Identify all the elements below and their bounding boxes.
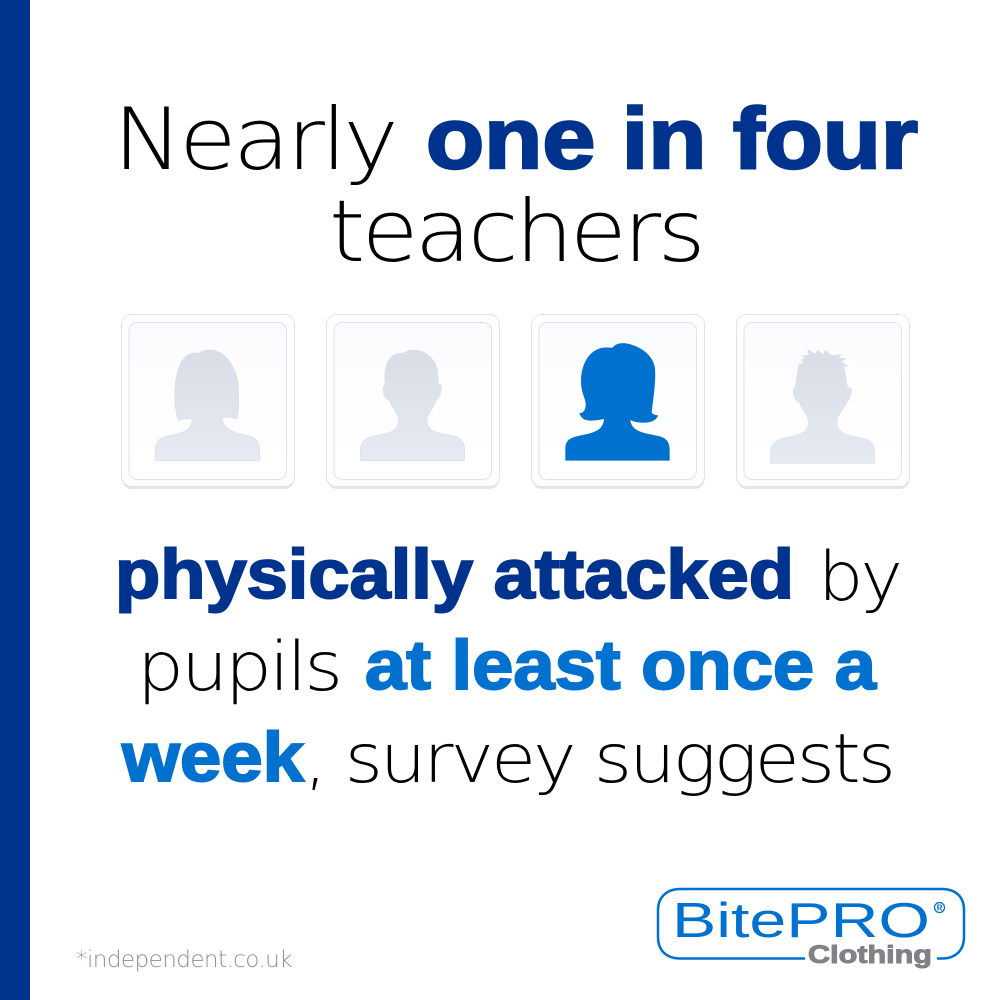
logo: BitePRO Clothing: R [937, 904, 943, 912]
card 4: man with spiky hair, grey [736, 314, 910, 489]
card 1: woman with bob haircut, grey [122, 314, 294, 489]
main statement: physically attacked [115, 535, 794, 613]
title [113, 90, 918, 282]
card 2: man with short hair, grey [326, 314, 500, 489]
main statement: week [121, 718, 304, 796]
main statement: by [818, 538, 900, 617]
main statement: , survey suggests [304, 720, 893, 799]
panel: four teacher silhouettes [122, 314, 910, 489]
left sidebar [0, 0, 30, 1000]
card 3: woman with flipped hair, highlighted blue [532, 314, 704, 489]
source note: *independent.co.uk [76, 947, 292, 973]
logo: BitePRO Clothing: BitePRO [672, 894, 930, 948]
logo: BitePRO Clothing: Clothing [808, 941, 932, 969]
title: teachers [329, 182, 702, 282]
main statement [115, 535, 900, 799]
main statement: pupils [137, 628, 340, 707]
logo: BitePRO Clothing [658, 889, 964, 969]
main statement: at least once a [365, 626, 877, 704]
title: Nearly [113, 90, 395, 190]
title: one in four [426, 91, 918, 187]
